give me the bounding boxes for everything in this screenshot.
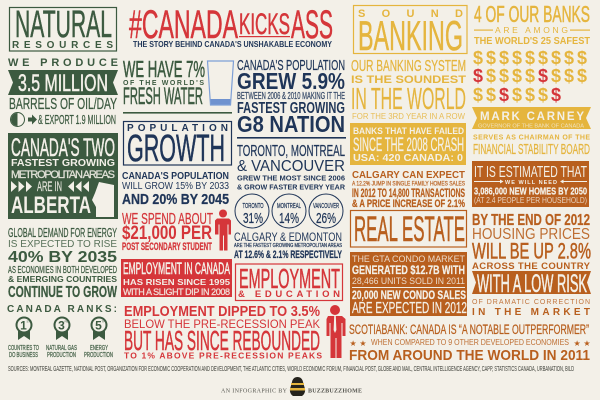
heading: employment and education: EMPLOYMENT: [239, 263, 340, 294]
chart: dollar signs: $: [512, 48, 522, 68]
text: barrels of oil per day: BARRELS OF OIL/DAY: [9, 96, 117, 113]
panel: real estate: [349, 161, 591, 364]
text: financial stability board: [473, 134, 590, 158]
chart: vancouver circle: VANCOUVER: [313, 203, 339, 210]
text: student spending: WE SPEND ABOUT: [122, 211, 213, 228]
heading: employment and education: [236, 263, 342, 300]
text: calgary can expect: IN 2012 TO 14,800 TRANSACTIONS: [352, 186, 465, 200]
chart: dollar signs: $: [486, 85, 496, 105]
text: rank labels: NATURAL GAS: [46, 345, 77, 352]
text: employment dipped: EMPLOYMENT DIPPED TO 3.5%: [124, 304, 320, 320]
text: population growth 5.9%: [237, 57, 346, 139]
chart: dollar signs: $: [525, 66, 535, 86]
text: rank labels: [8, 345, 113, 359]
footer: an infographic by: AN INFOGRAPHIC BY: [221, 388, 288, 394]
chart: dollar signs: $: [525, 85, 535, 105]
banner: 3.5 million: 3.5 MILLION: [18, 70, 108, 97]
text: calgary can expect: A 12.2% JUMP IN SINGLE FAMILY HOMES SALES: [352, 182, 465, 188]
panel: failed banks: USA: 420 CANADA: 0: [353, 153, 463, 164]
panel: fastest growing metro areas: [8, 133, 118, 219]
text: calgary can expect: [352, 169, 466, 210]
text: calgary can expect: CALGARY CAN EXPECT: [352, 169, 466, 181]
text: dramatic correction: IN THE MARKET: [472, 307, 590, 318]
text: rank labels: DO BUSINESS: [9, 352, 38, 359]
chart: dollar signs: $: [538, 48, 548, 68]
panel: employment in canada: [121, 259, 232, 297]
text: population growth 5.9%: CANADA'S POPULATION: [237, 57, 345, 74]
chart: dollar signs: $: [499, 48, 509, 68]
chart: vancouver circle: [309, 194, 343, 228]
panel: real estate: REAL ESTATE: [354, 210, 465, 249]
text: employment dipped: BELOW THE PRE-RECESSION PEAK: [124, 319, 320, 331]
heading: natural resources: RESOURCES: [12, 40, 113, 51]
chart: dollar signs: $: [525, 48, 535, 68]
text: global demand for energy: IS EXPECTED TO RISE: [8, 239, 117, 250]
heading: population growth: POPULATION: [127, 123, 228, 134]
chart: dollar signs: $: [512, 66, 522, 86]
text: export: & EXPORT 1.9 MILLION: [38, 112, 116, 127]
panel: employment in canada: HAS RISEN SINCE 1995: [123, 277, 230, 287]
panel: new homes estimate: WE WILL NEED: [505, 180, 557, 186]
panel: employment and education: [121, 210, 346, 360]
banner: mark carney: [472, 107, 591, 130]
text: fastest growing: FASTEST GROWING: [11, 158, 115, 169]
text: dramatic correction: [472, 299, 590, 318]
text: soundest in the world: OUR BANKING SYSTEM: [351, 58, 466, 75]
icon: right arrows: [11, 181, 32, 192]
icon: map of alberta: [92, 182, 114, 217]
chart: dollar signs: $: [473, 66, 483, 86]
panel: fresh water: OF THE WORLD'S: [123, 80, 204, 87]
panel: population growth: [122, 57, 346, 261]
panel: failed banks: [350, 123, 466, 165]
icon: oil gauge: [10, 112, 24, 126]
panel: failed banks: SINCE THE 2008 CRASH: [353, 135, 464, 156]
text: global demand for energy: GLOBAL DEMAND FOR ENERGY: [8, 225, 117, 240]
text: 4 of our banks: [474, 1, 590, 47]
panel: employment in canada: WITH A SLIGHT DIP IN 2008: [123, 287, 230, 297]
title: ASS: [291, 3, 333, 47]
icon: rank 5th: 5: [95, 318, 102, 332]
text: population growth 5.9%: FASTEST GROWING: [237, 100, 345, 117]
text: dramatic correction: OF DRAMATIC CORRECTION: [472, 299, 590, 306]
chart: dollar signs: $: [473, 48, 483, 68]
heading: natural resources: NATURAL: [15, 4, 112, 46]
text: employment dipped: [124, 304, 322, 360]
chart: toronto circle: 31%: [243, 211, 263, 227]
text: calgary and edmonton: CALGARY & EDMONTON: [234, 230, 342, 244]
text: 4 of our banks: THE WORLD'S 25 SAFEST: [474, 36, 590, 47]
icon: rank 1st: [16, 316, 32, 340]
text: global demand for energy: CONTINUE TO GROW: [8, 284, 118, 301]
text: rank labels: COUNTRIES TO: [8, 345, 39, 352]
text: rank labels: ENERGY: [90, 345, 108, 352]
icon: rank 3rd: RD: [64, 320, 70, 324]
text: soundest in the world: FOR THE 3RD YEAR IN A ROW: [352, 111, 465, 121]
text: canada's two: CANADA'S TWO: [11, 134, 115, 162]
text: population forecast: [122, 171, 229, 208]
text: global demand for energy: AS ECONOMIES IN BOTH DEVELOPED: [8, 264, 117, 276]
text: toronto montreal vancouver: TORONTO, MONTREAL: [237, 143, 345, 160]
icon: rank 3rd: 3: [58, 318, 65, 332]
chart: dollar signs: $: [551, 66, 561, 86]
chart: dollar signs: $: [486, 66, 496, 86]
icon: rank 3rd: [54, 316, 70, 340]
heading: natural resources: [10, 4, 116, 51]
icon: student figure: [215, 210, 231, 250]
text: scotiabank outperformer: [349, 322, 590, 364]
chart: dollar signs: $: [551, 48, 561, 68]
text: rank labels: PRODUCTION: [84, 352, 113, 359]
panel: fresh water: [123, 56, 232, 114]
text: calgary can expect: & A PRICE INCREASE OF 2.1%: [352, 198, 465, 210]
text: population forecast: AND 20% BY 2045: [122, 191, 229, 208]
banner: 3.5 million: [8, 70, 118, 97]
text: are in: ARE IN: [37, 178, 62, 194]
text: calgary and edmonton: ARE THE FASTEST GROWING METROPOLITAN AREAS: [234, 243, 342, 249]
chart: vancouver circle: 26%: [316, 211, 336, 227]
chart: montreal circle: 14%: [279, 211, 299, 227]
heading: sound banking: [354, 6, 467, 59]
text: global demand for energy: & EMERGING COUNTRIES: [8, 274, 117, 284]
text: toronto montreal vancouver: & VANCOUVER: [237, 158, 345, 175]
chart: dollar signs: $: [499, 66, 509, 86]
text: population growth 5.9%: GREW 5.9%: [237, 68, 345, 94]
title: KICKS: [239, 8, 290, 41]
chart: montreal circle: [272, 194, 306, 228]
panel: gta condo market: [350, 252, 467, 317]
text: population growth 5.9%: BETWEEN 2006 & 2010 MAKING IT THE: [237, 91, 345, 102]
text: population forecast: CANADA'S POPULATION: [122, 171, 229, 182]
heading: sound banking: SOUND: [358, 8, 463, 20]
text: 4 of our banks: ARE AMONG: [495, 25, 568, 35]
footer: buzzbuzzhome: BUZZBUZZHOME: [308, 388, 362, 394]
title: #CANADA: [129, 3, 238, 47]
text: toronto montreal vancouver: [237, 143, 345, 192]
text: soundest in the world: [351, 58, 466, 121]
text: alberta: ALBERTA: [11, 192, 91, 219]
text: soundest in the world: IS THE SOUNDEST: [351, 74, 466, 86]
chart: montreal circle: MONTREAL: [277, 203, 301, 210]
icon: buzzbuzzhome hive: [290, 377, 305, 396]
subtitle: THE STORY BEHIND CANADA'S UNSHAKABLE ECONOMY: [133, 39, 332, 49]
chart: dollar signs: $: [564, 48, 574, 68]
chart: dollar signs: $: [486, 48, 496, 68]
chart: dollar signs: $: [564, 66, 574, 86]
text: calgary and edmonton: [234, 230, 342, 261]
icon: rank 1st: ST: [26, 320, 31, 324]
panel: fresh water: FRESH WATER: [123, 83, 203, 110]
panel: gta condo market: GENERATED $12.7B WITH: [352, 263, 465, 277]
chart: dollar signs: $: [551, 85, 561, 105]
icon: business man: [326, 305, 346, 358]
text: student spending: [122, 211, 213, 253]
text: employment dipped: TO 1% ABOVE PRE-RECESSION PEAKS: [124, 350, 322, 360]
text: rank labels: PRODUCTION: [47, 352, 76, 359]
panel: gta condo market: 28,466 UNITS SOLD IN 2011: [352, 276, 465, 287]
panel: new homes estimate: [472, 161, 589, 207]
text: metropolitan areas: METROPOLITAN AREAS: [11, 169, 115, 181]
text: we produce: WE PRODUCE: [8, 57, 118, 69]
heading: population growth: GROWTH: [127, 128, 225, 170]
panel: gta condo market: ARE EXPECTED IN 2012: [352, 300, 467, 317]
heading: sound banking: BANKING: [358, 12, 463, 59]
text: housing prices forecast: ACROSS THE COUNTRY: [472, 261, 591, 272]
icon: rank 5th: TH: [102, 320, 106, 324]
text: soundest in the world: IN THE WORLD: [351, 81, 466, 116]
text: global demand for energy: [8, 225, 118, 301]
panel: failed banks: BANKS THAT HAVE FAILED: [353, 126, 464, 136]
panel: gta condo market: 20,000 NEW CONDO SALES: [352, 288, 466, 302]
text: student spending: $21,000 PER: [122, 223, 212, 244]
banner: mark carney: MARK CARNEY: [480, 111, 584, 123]
heading: employment and education: & EDUCATION: [238, 289, 340, 300]
text: toronto montreal vancouver: GREW THE MOST SINCE 2006: [237, 176, 345, 182]
icon: water glass: [208, 61, 234, 105]
chart: dollar signs: $: [512, 85, 522, 105]
text: global demand for energy: 40% BY 2035: [8, 249, 117, 266]
icon: rank 1st: 1: [20, 318, 27, 332]
icon: arrow: [28, 114, 37, 124]
chart: dollar signs: $: [577, 48, 587, 68]
text: housing prices forecast: [472, 212, 591, 272]
chart: dollar signs: $: [473, 85, 483, 105]
panel: sound banking: [350, 1, 591, 165]
panel: fresh water: WE HAVE 7%: [123, 56, 205, 82]
panel: employment and education: BUT HAS SINCE REBOUNDED: [124, 325, 320, 356]
chart: dollar signs: $: [538, 85, 548, 105]
text: toronto montreal vancouver: & GROW FASTER EVERY YEAR: [237, 184, 345, 192]
chart: dollar signs: $: [499, 85, 509, 105]
text: student spending: POST SECONDARY STUDENT: [122, 241, 212, 253]
text: canada ranks: CANADA RANKS:: [7, 304, 117, 315]
panel: employment in canada: EMPLOYMENT IN CANADA: [123, 259, 230, 278]
chart: toronto circle: TORONTO: [242, 203, 264, 210]
chart: dollar signs: $: [577, 66, 587, 86]
chart: dollar signs: $: [538, 66, 548, 86]
icon: stars left: ★★: [350, 339, 366, 348]
icon: rank 5th: [90, 316, 108, 340]
heading: population growth: [124, 122, 232, 170]
banner: mark carney: GOVERNOR OF THE BANK OF CANADA: [478, 124, 584, 130]
text: population forecast: WILL GROW 15% BY 2033: [122, 181, 229, 192]
text: calgary and edmonton: AT 12.6% & 2.1% RESPECTIVELY: [234, 249, 342, 261]
panel: gta condo market: THE GTA CONDO MARKET: [352, 254, 465, 265]
icon: stars right: ★★: [574, 339, 590, 348]
heading: real estate: [350, 210, 466, 249]
icon: left arrows: [68, 181, 89, 192]
text: population growth 5.9%: G8 NATION: [237, 111, 345, 137]
chart: toronto circle: [235, 194, 269, 228]
chart: dollar signs: [473, 48, 587, 105]
text: financial stability board: SERVES AS CHAIRMAN OF THE: [473, 134, 590, 142]
panel: natural resources column: [7, 4, 118, 359]
